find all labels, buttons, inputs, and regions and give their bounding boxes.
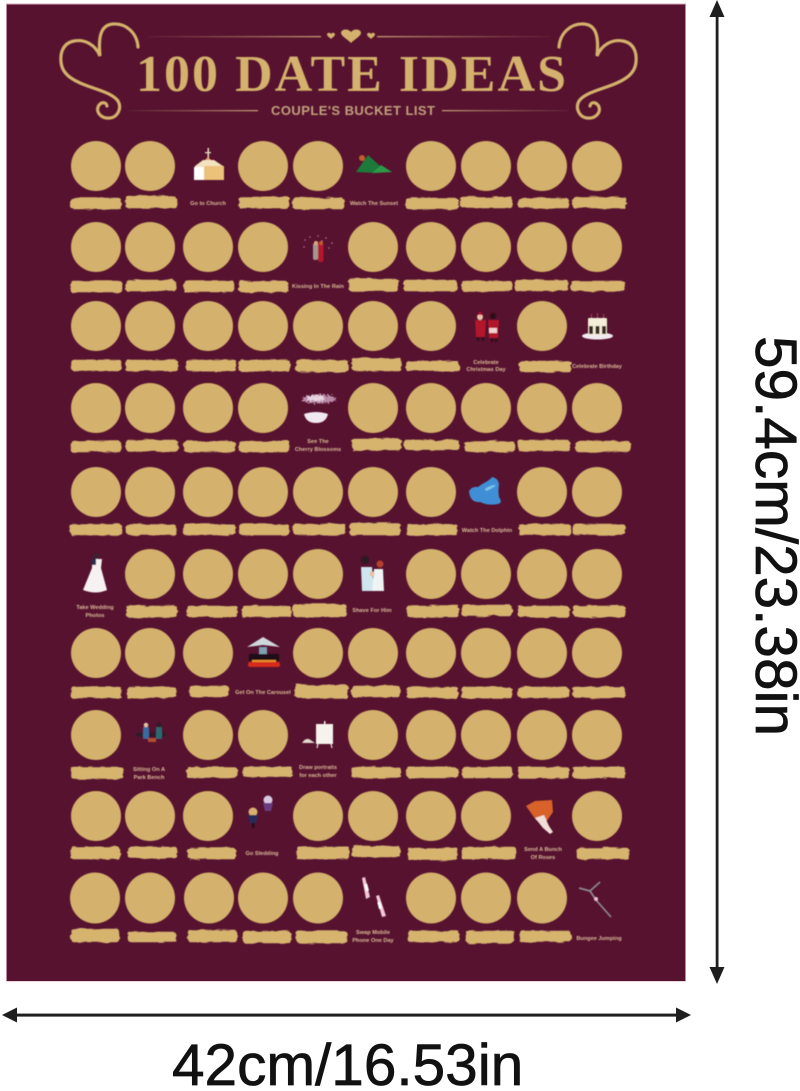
item: Sitting On A Park Bench: Sitting On A xyxy=(133,767,165,773)
poster panel xyxy=(6,4,686,982)
vertical dimension arrow xyxy=(710,0,724,984)
row 4 xyxy=(71,383,629,453)
item: Draw portraits for each other: Draw portraits xyxy=(299,765,337,771)
brush strokes xyxy=(71,524,624,534)
item: Draw portraits for each other xyxy=(299,721,337,779)
item: Watch The Sunset xyxy=(350,155,398,207)
top rule with hearts xyxy=(148,29,550,43)
item: Swap Mobile Phone One Day xyxy=(352,877,395,944)
item: Kissing In The Rain: Kissing In The Rain xyxy=(292,284,345,290)
scratch circles xyxy=(70,872,567,924)
item: Watch The Dolphin: Watch The Dolphin xyxy=(462,528,513,534)
item: See The Cherry Blossoms xyxy=(295,394,341,453)
item: Swap Mobile Phone One Day: Swap Mobile xyxy=(356,930,390,936)
item: Celebrate Christmas Day xyxy=(466,311,506,373)
item: Celebrate Birthday xyxy=(572,313,623,370)
brush strokes xyxy=(72,359,570,371)
item: Bungee Jumping xyxy=(576,882,622,942)
row 1 xyxy=(71,141,625,208)
item: Celebrate Christmas Day: Celebrate xyxy=(473,360,499,366)
left heart swirl ornament xyxy=(61,24,138,118)
item: Swap Mobile Phone One Day: Phone One Day xyxy=(352,938,395,944)
row 5 xyxy=(71,467,624,534)
item: Get On The Carousel xyxy=(235,637,291,696)
item: Go Sledding xyxy=(246,796,279,857)
item: Shave For Him xyxy=(352,556,392,614)
item: Go to Church xyxy=(190,148,226,207)
scratch circles xyxy=(125,549,622,599)
title: 100 DATE IDEAS xyxy=(136,46,566,103)
item: Sitting On A Park Bench xyxy=(133,723,165,781)
brush strokes xyxy=(72,768,624,778)
item: See The Cherry Blossoms: See The xyxy=(307,439,329,445)
item: Bungee Jumping: Bungee Jumping xyxy=(576,936,622,942)
item: Get On The Carousel: Get On The Carousel xyxy=(235,690,291,696)
row 3 xyxy=(71,301,623,373)
row 2 xyxy=(71,222,624,291)
scratch circles xyxy=(71,383,622,433)
item: Celebrate Birthday: Celebrate Birthday xyxy=(572,364,623,370)
scratch circles xyxy=(71,141,622,191)
item: Celebrate Christmas Day: Christmas Day xyxy=(466,367,506,373)
right heart swirl ornament xyxy=(559,24,636,118)
item: Shave For Him: Shave For Him xyxy=(352,608,392,614)
item: Take Wedding Photos: Photos xyxy=(86,613,104,619)
row 7 xyxy=(71,628,624,697)
scratch circles xyxy=(71,791,622,841)
brush strokes xyxy=(72,930,570,942)
item: Send A Bunch Of Roses: Of Roses xyxy=(531,855,555,861)
row 10 xyxy=(70,872,622,944)
brush strokes xyxy=(72,440,629,451)
brush strokes xyxy=(72,280,624,291)
item: Take Wedding Photos: Take Wedding xyxy=(76,605,114,611)
item: Draw portraits for each other: for each other xyxy=(299,773,337,779)
brush strokes xyxy=(72,197,625,208)
brush strokes xyxy=(72,686,624,697)
scratch circles xyxy=(71,710,622,760)
item: Go Sledding: Go Sledding xyxy=(246,851,279,857)
item: Watch The Dolphin xyxy=(462,477,513,534)
item: Send A Bunch Of Roses xyxy=(524,800,562,861)
scratch circles xyxy=(71,628,622,678)
brush strokes xyxy=(72,847,628,859)
item: Sitting On A Park Bench: Park Bench xyxy=(134,775,165,781)
row 9 xyxy=(71,791,628,861)
scratch circles xyxy=(71,467,622,517)
subtitle with rules: COUPLE'S BUCKET LIST xyxy=(271,103,435,118)
item: Kissing In The Rain xyxy=(292,235,345,290)
header xyxy=(61,24,636,118)
item: Go to Church: Go to Church xyxy=(190,201,226,207)
item: Send A Bunch Of Roses: Send A Bunch xyxy=(524,847,562,853)
row 8 xyxy=(71,710,624,781)
scratch circles xyxy=(71,222,622,272)
scratch circles xyxy=(71,301,567,351)
item: Watch The Sunset: Watch The Sunset xyxy=(350,201,398,207)
brush strokes xyxy=(127,605,624,616)
row 6 xyxy=(76,549,624,619)
horizontal dimension arrow xyxy=(2,1008,691,1022)
item: See The Cherry Blossoms: Cherry Blossoms xyxy=(295,447,341,453)
item: Take Wedding Photos xyxy=(76,553,114,619)
